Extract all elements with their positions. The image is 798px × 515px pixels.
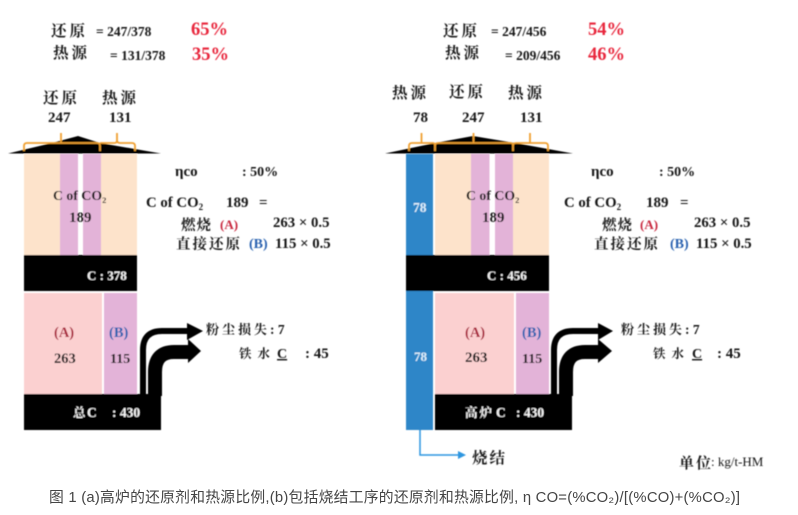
lower column b: 115 (522, 352, 542, 367)
ratio summary b: = 247/456 (491, 24, 547, 39)
top labels b: 热源 (392, 81, 429, 103)
formula a: 263 × 0.5 (273, 215, 330, 231)
upper column a: C of CO (53, 188, 102, 203)
unit label: : kg/t-HM (711, 454, 764, 469)
formula a: = (259, 195, 268, 211)
formula a: 2 (199, 202, 204, 212)
ratio summary a: 35% (192, 45, 229, 65)
formula a: 直接还原 (176, 233, 242, 254)
formula a: 189 (226, 195, 248, 211)
output labels b: C (692, 347, 702, 362)
ratio summary a: 65% (191, 20, 228, 40)
formula b: ηco (591, 164, 614, 180)
unit label: 单位 (679, 452, 713, 473)
top labels b: 热源 (508, 81, 545, 103)
lower column b (435, 293, 549, 394)
lower column a: (A) (54, 325, 74, 341)
lower column a: 115 (110, 352, 130, 367)
top labels b: 247 (462, 110, 485, 126)
formula a (146, 164, 331, 254)
formula a: 燃烧 (180, 214, 212, 235)
output labels a: : 7 (270, 322, 285, 337)
top labels a: 247 (48, 110, 71, 126)
output labels a: C (277, 347, 287, 362)
formula a: (B) (249, 237, 268, 252)
top labels a: 热源 (102, 86, 139, 108)
top labels b: 78 (413, 110, 428, 126)
formula b: (B) (670, 237, 689, 252)
formula b: = (680, 195, 689, 211)
ratio summary a: = 247/378 (96, 24, 152, 39)
ratio summary b: 热源 (445, 41, 482, 63)
base and outlet arrows a: : 430 (112, 405, 140, 420)
black band b (406, 255, 549, 291)
ratio summary a: 热源 (53, 41, 90, 63)
top labels b: 还原 (449, 80, 486, 102)
black band b: C : 456 (487, 268, 527, 283)
unit label (679, 452, 764, 473)
formula b (564, 164, 752, 254)
top labels b: 131 (520, 110, 542, 126)
output labels b: : 45 (717, 346, 741, 362)
black band a: C : 378 (87, 268, 127, 283)
output labels b: 铁水 (653, 344, 690, 362)
ratio summary b (443, 19, 625, 65)
top labels a: 还原 (43, 86, 80, 108)
formula a: : 50% (242, 165, 278, 180)
base and outlet arrows b: 高炉 (465, 403, 494, 421)
base and outlet arrows a: 总 (73, 403, 87, 421)
ratio summary b: = 209/456 (505, 48, 561, 63)
base and outlet arrows b: : 430 (516, 405, 544, 420)
furnace roof b (385, 136, 573, 154)
formula a: C of CO (146, 195, 199, 211)
formula b: 燃烧 (601, 214, 633, 235)
ratio summary b: 46% (588, 45, 625, 65)
output labels a: : 45 (305, 346, 329, 362)
upper column a (24, 154, 137, 255)
formula b: C of CO (564, 195, 617, 211)
upper column a: 189 (69, 210, 92, 226)
panel: blast furnace b (385, 19, 764, 473)
lower column b: (A) (465, 325, 485, 341)
formula b: : 50% (659, 165, 695, 180)
sinter blue column: 78 (413, 200, 427, 215)
furnace roof a (8, 136, 161, 154)
output labels a: 粉尘损失 (206, 319, 270, 338)
formula b: 189 (646, 195, 668, 211)
formula b: 2 (617, 202, 622, 212)
output labels a (206, 319, 329, 362)
ratio summary b: 还原 (443, 19, 480, 41)
base and outlet arrows a (24, 323, 203, 430)
figure caption: 图 1 (a)高炉的还原剂和热源比例,(b)包括烧结工序的还原剂和热源比例, η CO=(%CO₂)/[(%CO)+(%CO₂)] (49, 489, 740, 506)
top labels b (392, 80, 545, 126)
lower column a: (B) (109, 325, 128, 341)
formula a: ηco (175, 164, 198, 180)
lower column a (24, 293, 137, 394)
top labels a: 131 (109, 110, 132, 126)
lower column a: 263 (54, 351, 76, 367)
base and outlet arrows b: C (496, 405, 506, 420)
formula b: 115 × 0.5 (696, 236, 752, 252)
sinter blue column: 78 (414, 349, 428, 364)
lower column b: 263 (465, 350, 488, 366)
formula a: (A) (220, 217, 238, 232)
ratio summary a: 还原 (51, 19, 88, 41)
sinter arrow: 烧结 (471, 446, 507, 468)
lower column b: (B) (522, 325, 542, 341)
upper column a: 2 (102, 195, 106, 205)
formula b: 直接还原 (594, 233, 660, 254)
formula a: 115 × 0.5 (275, 236, 331, 252)
formula b: 263 × 0.5 (694, 215, 751, 231)
upper column b (435, 154, 549, 255)
output labels b: : 7 (685, 322, 700, 337)
formula b: (A) (640, 217, 658, 232)
base and outlet arrows a: C (87, 405, 97, 420)
output labels a: 铁水 (239, 344, 276, 362)
ratio summary b: 54% (588, 20, 625, 40)
base and outlet arrows b (435, 323, 613, 430)
bracket b (409, 133, 548, 151)
upper column b: C of CO (466, 188, 515, 203)
ratio summary a: = 131/378 (110, 48, 166, 63)
sinter blue column (406, 154, 433, 430)
panel: blast furnace a (8, 19, 331, 430)
upper column b: 2 (515, 195, 519, 205)
bracket a (24, 133, 135, 151)
ratio summary a (51, 19, 229, 65)
output labels b (621, 319, 741, 362)
upper column b: 189 (482, 210, 504, 226)
sinter arrow (420, 430, 507, 468)
output labels b: 粉尘损失 (621, 319, 685, 338)
top labels a (43, 86, 139, 126)
black band a (24, 255, 137, 291)
